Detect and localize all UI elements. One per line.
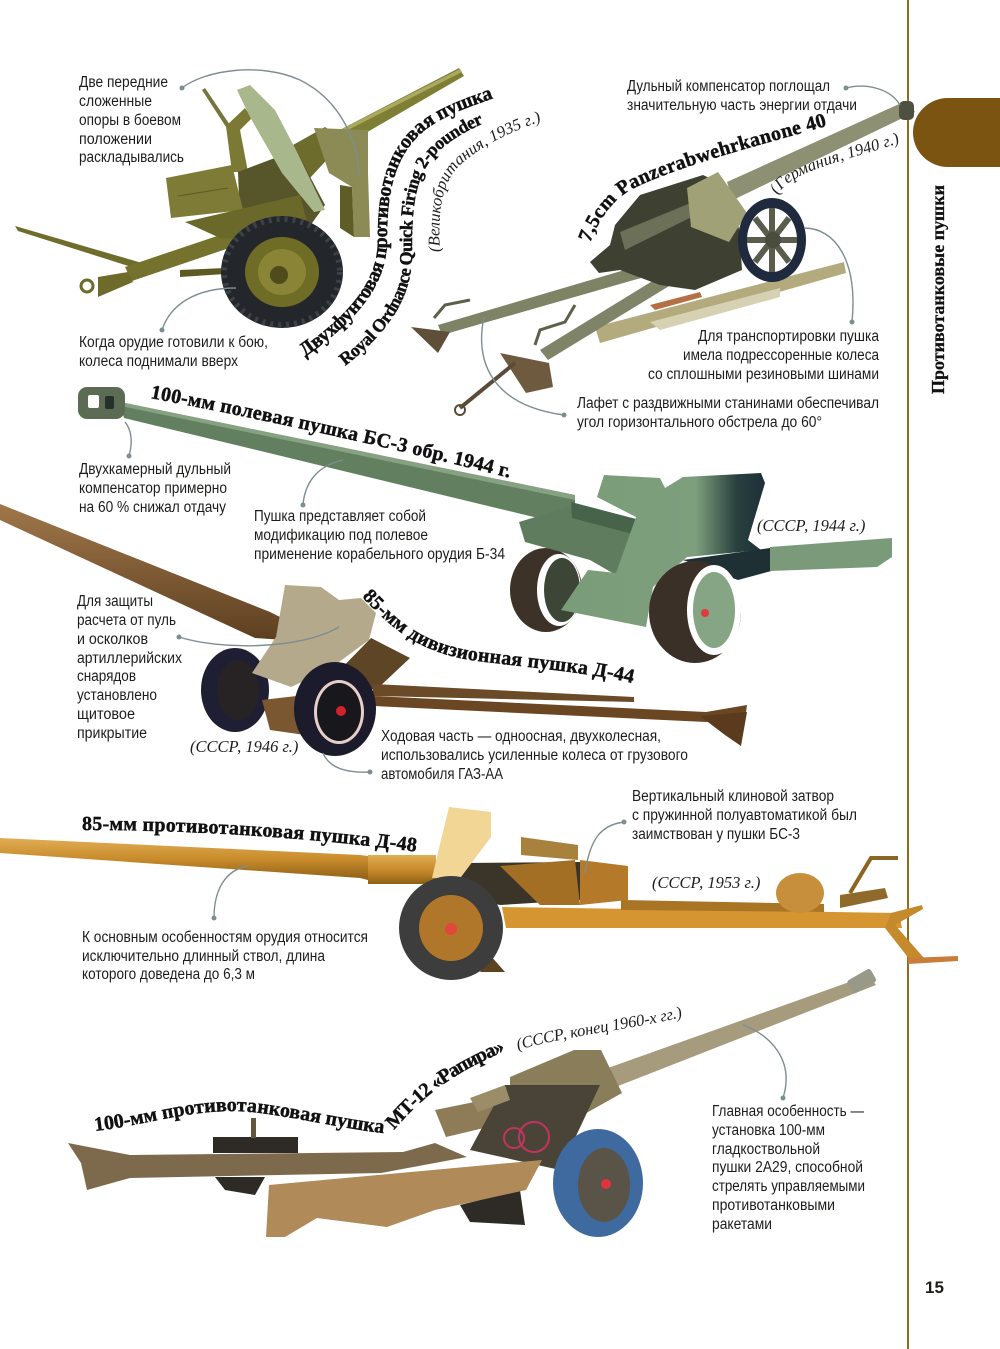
callout: wheels raised: колеса поднимали вверх	[79, 353, 238, 370]
callout: wheels raised: Когда орудие готовили к бою,	[79, 334, 268, 351]
callout: sprung wheels: Для транспортировки пушка	[698, 328, 879, 345]
sidebar: vertical rule	[907, 0, 909, 1349]
callout: folded supports: положении	[79, 131, 152, 148]
title: 2-pounder: Двухфунтовая противотанковая пушка	[299, 90, 494, 360]
title: MT-12: 100-мм противотанковая пушка	[95, 1102, 384, 1134]
callout: smoothbore: противотанковыми	[712, 1197, 835, 1214]
callout: smoothbore: установка 100-мм	[712, 1122, 825, 1139]
origin: BS-3: (СССР, 1944 г.)	[757, 516, 865, 535]
callout: split trail	[482, 317, 879, 431]
callout: shield: прикрытие	[77, 725, 147, 742]
callout: BS-3 muzzle brake: Двухкамерный дульный	[79, 461, 231, 478]
title: D-44: 85-мм дивизионная пушка Д-44	[363, 589, 634, 683]
callout: folded supports: Две передние	[79, 74, 168, 91]
callout: shield	[77, 593, 339, 742]
callout: running gear: автомобиля ГАЗ-АА	[381, 766, 504, 783]
callout: long barrel: исключительно длинный ствол, длина	[82, 948, 325, 965]
title: 2-pounder: (Великобритания, 1935 г.)	[428, 112, 540, 252]
callout: folded supports	[79, 70, 359, 177]
callout: sprung wheels	[648, 228, 879, 383]
callout: BS-3 muzzle brake	[79, 422, 231, 516]
title: Pak 40: (Германия, 1940 г.)	[771, 132, 898, 195]
sidebar: chapter title: Противотанковые пушки	[928, 185, 948, 394]
title: Pak 40: 7,5cm Panzerabwehrkanone 40	[578, 114, 826, 242]
callout: running gear: использовались усиленные колеса от грузового	[381, 747, 688, 764]
callout: naval gun origin	[254, 460, 505, 563]
callout: naval gun origin: модификацию под полевое	[254, 527, 428, 544]
callout: folded supports: сложенные	[79, 93, 152, 110]
callout: shield: снарядов	[77, 668, 136, 685]
callout: shield: артиллерийских	[77, 650, 182, 667]
callout: breech	[585, 788, 857, 873]
callout: running gear: Ходовая часть — одноосная, двухколесная,	[381, 728, 661, 745]
callout: smoothbore: гладкоствольной	[712, 1141, 820, 1158]
callout: muzzle brake Pak 40: значительную часть энергии отдачи	[627, 97, 857, 114]
gun: 7.5cm Pak 40	[411, 100, 915, 415]
callout: running gear	[323, 728, 688, 783]
callout: shield: установлено	[77, 687, 157, 704]
callout: breech: заимствован у пушки БС-3	[632, 826, 800, 843]
callout: smoothbore: Главная особенность —	[712, 1103, 864, 1120]
origin: D-48: (СССР, 1953 г.)	[652, 873, 760, 892]
title: BS-3: 100-мм полевая пушка БС-3 обр. 1944 г.	[151, 386, 509, 478]
callout: breech: Вертикальный клиновой затвор	[632, 788, 834, 805]
gun: MT-12 Rapira	[68, 968, 877, 1237]
gun: D-48	[0, 807, 958, 980]
title: MT-12: МТ-12 «Рапира»	[384, 1044, 503, 1130]
title: MT-12: (СССР, конец 1960-х гг.)	[518, 1006, 682, 1052]
title: MT-12	[95, 1006, 682, 1134]
callout: long barrel: которого доведена до 6,3 м	[82, 966, 255, 983]
callout: long barrel	[82, 866, 368, 983]
callout: shield: Для защиты	[77, 593, 153, 610]
title: D-48: 85-мм противотанковая пушка Д-48	[82, 816, 417, 853]
callout: smoothbore: пушки 2А29, способной	[712, 1159, 863, 1176]
callout: sprung wheels: со сплошными резиновыми шинами	[648, 366, 879, 383]
gun: 2-pounder	[15, 68, 464, 328]
callout: smoothbore: стрелять управляемыми	[712, 1178, 865, 1195]
callout: long barrel: К основным особенностям орудия относится	[82, 929, 368, 946]
callout: breech: с пружинной полуавтоматикой был	[632, 807, 857, 824]
callout: BS-3 muzzle brake: компенсатор примерно	[79, 480, 227, 497]
gun: D-44	[0, 504, 747, 756]
callout: naval gun origin: Пушка представляет собой	[254, 508, 426, 525]
callout: naval gun origin: применение корабельного орудия Б-34	[254, 546, 505, 563]
callout: BS-3 muzzle brake: на 60 % снижал отдачу	[79, 499, 226, 516]
callout: muzzle brake Pak 40: Дульный компенсатор поглощал	[627, 78, 830, 95]
gun: BS-3	[78, 387, 892, 663]
callout: shield: щитовое	[77, 706, 135, 723]
callout: smoothbore: ракетами	[712, 1216, 772, 1233]
title: 2-pounder: Royal Ordnance Quick Firing 2-pounder	[338, 115, 482, 366]
callout: split trail: Лафет с раздвижными станинами обеспечивал	[577, 395, 879, 412]
callout: shield: и осколков	[77, 631, 148, 648]
callout: folded supports: опоры в боевом	[79, 112, 181, 129]
callout: smoothbore	[712, 1025, 865, 1233]
origin: D-44: (СССР, 1946 г.)	[190, 737, 298, 756]
callout: sprung wheels: имела подрессоренные колеса	[683, 347, 879, 364]
callout: folded supports: раскладывались	[79, 149, 184, 166]
callout: muzzle brake Pak 40	[627, 78, 900, 114]
callout: wheels raised	[79, 288, 268, 370]
page number: 15	[925, 1278, 944, 1297]
sidebar: brown chapter tab	[913, 98, 1000, 167]
callout: shield: расчета от пуль	[77, 612, 176, 629]
callout: split trail: угол горизонтального обстрела до 60°	[577, 414, 822, 431]
